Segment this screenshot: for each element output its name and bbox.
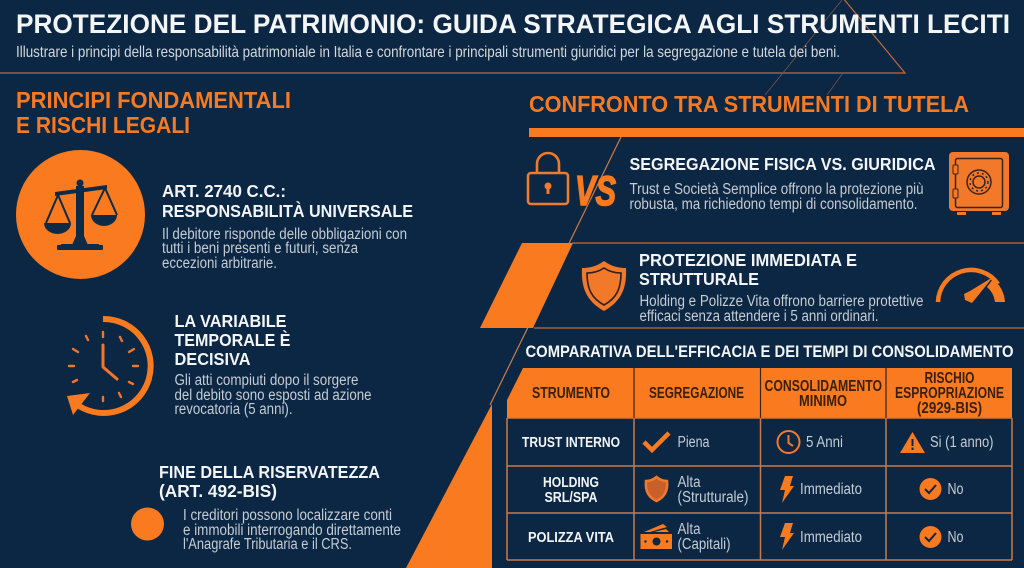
- text block: segregazione: robusta, ma richiedono tempi di consolidamento.: [630, 196, 918, 213]
- row: holding: SRL/SPA: [544, 490, 598, 506]
- text block: variabile temporale: del debito sono esposti ad azione: [174, 387, 372, 404]
- text block: protezione immediata: efficaci senza attendere i 5 anni ordinari.: [640, 308, 878, 325]
- heading: confronto: CONFRONTO TRA STRUMENTI DI TUTELA: [529, 91, 969, 117]
- row: trust interno: 5 Anni: [806, 434, 843, 451]
- text block: variabile temporale: revocatoria (5 anni).: [174, 401, 292, 418]
- text block: art. 2740: tutti i beni presenti e futuri, senza: [162, 240, 358, 257]
- row: trust interno: Piena: [678, 434, 710, 451]
- text block: segregazione: SEGREGAZIONE FISICA VS. GIURIDICA: [630, 154, 936, 174]
- table header labels: SEGREGAZIONE: [649, 385, 744, 402]
- table header background: [507, 368, 1012, 418]
- row: polizza vita: Immediato: [800, 529, 862, 546]
- row: holding: [543, 474, 964, 506]
- icon: shield: [582, 261, 626, 311]
- table header labels: (2929-BIS): [917, 400, 982, 417]
- text block: art. 2740: [162, 181, 413, 272]
- icon: lightning bolt: [780, 523, 794, 550]
- text block: fine della riservatezza: FINE DELLA RISERVATEZZA: [159, 462, 380, 482]
- text block: protezione immediata: [639, 250, 924, 325]
- icon: check circle: [920, 526, 942, 548]
- icon: scales in orange circle: [16, 150, 145, 279]
- table header labels: RISCHIO: [924, 370, 974, 387]
- icon: padlock: [528, 153, 568, 204]
- text block: protezione immediata: Holding e Polizze Vita offrono barriere protettive: [640, 293, 924, 310]
- heading: principi fondamentali: E RISCHI LEGALI: [16, 112, 190, 138]
- icon: orange dot: [131, 508, 164, 540]
- comparison table: [507, 368, 1012, 560]
- decorative orange parallelogram: [480, 243, 573, 328]
- text block: variabile temporale: [174, 311, 372, 418]
- row: polizza vita: [528, 521, 964, 553]
- row: holding: No: [948, 481, 964, 498]
- text block: art. 2740: ART. 2740 C.C.:: [162, 181, 286, 201]
- row: holding: HOLDING: [543, 475, 599, 491]
- text block: fine della riservatezza: [159, 462, 401, 553]
- heading: principi fondamentali: [16, 87, 291, 138]
- text block: art. 2740: Il debitore risponde delle obbligazioni con: [162, 226, 407, 243]
- heading: principi fondamentali: PRINCIPI FONDAMENTALI: [16, 87, 291, 113]
- text block: protezione immediata: STRUTTURALE: [639, 269, 759, 289]
- text block: fine della riservatezza: I creditori possono localizzare conti: [183, 507, 392, 524]
- text block: fine della riservatezza: l'Anagrafe Tributaria e il CRS.: [183, 536, 352, 553]
- row: trust interno: TRUST INTERNO: [522, 435, 620, 451]
- icon: warning triangle: [900, 432, 925, 453]
- icon: money: [640, 524, 672, 549]
- text block: fine della riservatezza: e immobili interrogando direttamente: [183, 522, 401, 539]
- icon: clock: [778, 431, 800, 453]
- subtitle: Illustrare i principi della responsabilità patrimoniale in Italia e confrontare i principali strumenti giuridici per la segregazione e tutela dei beni.: [16, 44, 840, 61]
- icon: VS: VS: [575, 167, 616, 214]
- table header labels: [532, 370, 1004, 417]
- text block: fine della riservatezza: (ART. 492-BIS): [159, 481, 277, 501]
- row: polizza vita: Alta: [678, 521, 701, 538]
- row: holding: Immediato: [800, 481, 862, 498]
- icon: lightning bolt: [780, 476, 794, 503]
- text block: variabile temporale: LA VARIABILE: [174, 311, 286, 331]
- decorative orange triangle: [406, 404, 492, 568]
- row: polizza vita: (Capitali): [678, 536, 730, 553]
- text block: segregazione: Trust e Società Semplice offrono la protezione più: [630, 181, 924, 198]
- heading rule: [529, 128, 1024, 137]
- icon: clock with arrow: [67, 319, 151, 415]
- row: trust interno: Si (1 anno): [930, 434, 994, 451]
- text block: variabile temporale: Gli atti compiuti dopo il sorgere: [174, 372, 358, 389]
- icon: check: [644, 433, 669, 450]
- table header labels: CONSOLIDAMENTO: [764, 378, 882, 395]
- row: polizza vita: No: [948, 529, 964, 546]
- row: holding: Alta: [678, 474, 701, 491]
- row: polizza vita: POLIZZA VITA: [528, 530, 614, 546]
- text block: art. 2740: eccezioni arbitrarie.: [162, 255, 277, 272]
- text block: variabile temporale: DECISIVA: [174, 349, 251, 369]
- icon: safe: [949, 152, 1009, 215]
- row: holding: (Strutturale): [678, 489, 748, 506]
- text block: variabile temporale: TEMPORALE È: [174, 329, 290, 350]
- text block: segregazione: [630, 154, 936, 213]
- icon: check circle: [920, 478, 942, 500]
- title: PROTEZIONE DEL PATRIMONIO: GUIDA STRATEGICA AGLI STRUMENTI LECITI: [16, 9, 1010, 39]
- table header labels: STRUMENTO: [532, 385, 610, 402]
- icon: speedometer gauge: [938, 270, 1005, 303]
- table header labels: MINIMO: [799, 393, 847, 410]
- text block: protezione immediata: PROTEZIONE IMMEDIATA E: [639, 250, 857, 270]
- text block: art. 2740: RESPONSABILITÀ UNIVERSALE: [162, 200, 413, 221]
- icon: small shield: [646, 477, 667, 501]
- row: trust interno: [522, 431, 994, 453]
